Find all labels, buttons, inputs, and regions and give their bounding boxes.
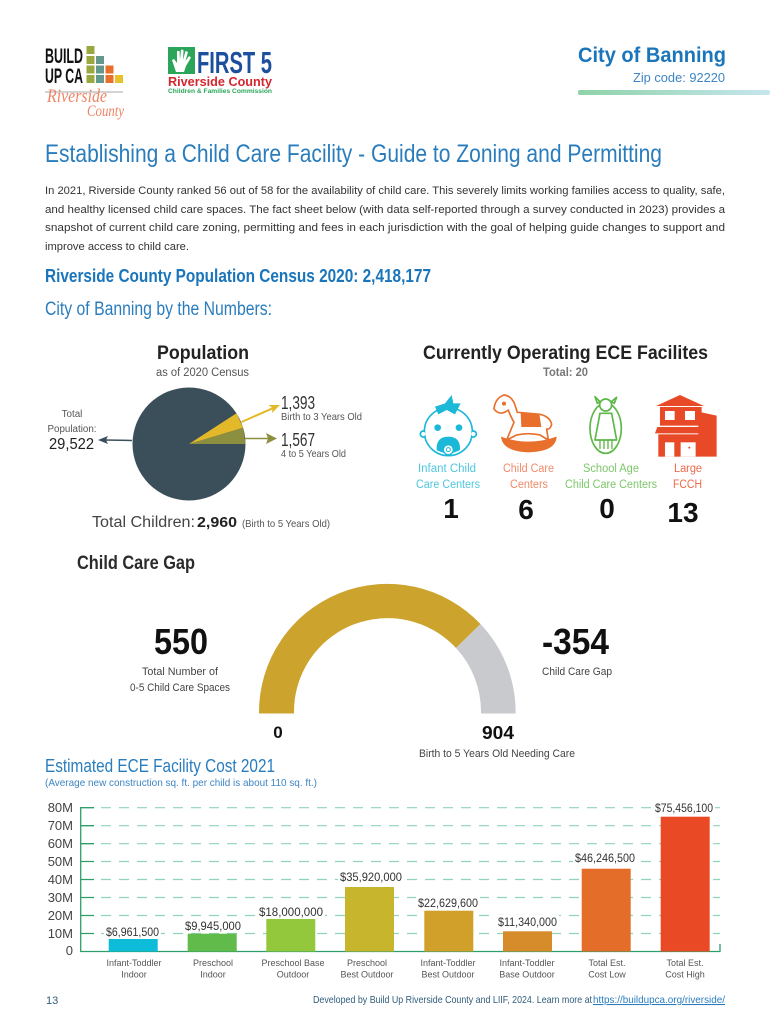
logo: First 5 Riverside County: [168, 45, 273, 95]
facility counts: [443, 493, 699, 528]
bar category labels: Total Est.: [666, 958, 704, 968]
facility counts: 0: [599, 493, 615, 524]
facility counts: 6: [518, 494, 534, 525]
title: Establishing a Child Care Facility - Guide to Zoning and Permitting: [45, 140, 662, 168]
panel: child care gap: [77, 553, 612, 760]
bar category labels: Total Est.: [588, 958, 626, 968]
bar value labels: $9,945,000: [185, 919, 241, 933]
ECE heading: Total: 20: [543, 367, 588, 379]
y axis: 60M: [48, 836, 73, 851]
header: city name: City of Banning: [578, 44, 726, 67]
label: school age: School Age: [583, 463, 639, 475]
bar category labels: Best Outdoor: [421, 970, 475, 980]
bar category labels: Indoor: [200, 970, 226, 980]
label: birth to 3: 1,393: [281, 393, 315, 413]
intro paragraph: and healthy licensed child care spaces. The fact sheet below (with data self-reported through a survey conducted in 2023) provides a: [45, 204, 726, 216]
total population label: Population:: [47, 424, 97, 435]
page number: 13: [46, 995, 58, 1007]
intro paragraph: improve access to child care.: [45, 241, 189, 253]
bar category labels: Indoor: [121, 970, 147, 980]
stat: 550: [130, 621, 230, 694]
intro paragraph: In 2021, Riverside County ranked 56 out of 58 for the availability of child care. This severely limits working families access to quality, safe,: [45, 185, 725, 197]
bar category labels: Cost High: [665, 970, 705, 980]
bar category labels: Best Outdoor: [340, 970, 394, 980]
total population label: [47, 409, 97, 453]
logo: First 5 Riverside County: FIRST 5: [197, 45, 272, 80]
facility counts: 1: [443, 493, 459, 524]
y axis: 70M: [48, 818, 73, 833]
y axis: 20M: [48, 908, 73, 923]
bar category labels: Outdoor: [277, 970, 309, 980]
population heading: [156, 343, 249, 379]
icon: girl jumping rope: [590, 397, 621, 453]
stat: 550: Total Number of: [142, 666, 219, 678]
logo: Build Up CA Riverside County: UP CA: [45, 65, 83, 88]
bar value labels: $22,629,600: [418, 896, 478, 910]
bar value labels: $6,961,500: [106, 925, 159, 939]
label: infant child care centers: [416, 463, 480, 491]
bar value labels: $11,340,000: [498, 915, 557, 929]
footer credit: Developed by Build Up Riverside County and LIIF, 2024. Learn more at: [313, 994, 592, 1006]
panel: ECE facilities: [416, 343, 717, 528]
y axis: 40M: [48, 872, 73, 887]
bar category labels: Cost Low: [588, 970, 626, 980]
gap heading: Child Care Gap: [77, 553, 195, 574]
label: large FCCH: FCCH: [673, 479, 702, 491]
bar category labels: Preschool Base: [261, 958, 325, 968]
bar category labels: [106, 958, 705, 980]
gauge maximum: 904: [482, 723, 514, 743]
label: school age: [565, 463, 657, 491]
logo: Build Up CA Riverside County: BUILD: [45, 45, 83, 68]
total children: (Birth to 5 Years Old): [242, 518, 330, 530]
label: child care centers: [503, 463, 554, 491]
footer credit: https://buildupca.org/riverside/: [593, 994, 725, 1006]
logo: Build Up CA Riverside County: [45, 45, 125, 120]
label: infant child care centers: Care Centers: [416, 479, 480, 491]
bar value labels: $18,000,000: [259, 905, 323, 919]
header: city name: Zip code: 92220: [633, 70, 725, 85]
intro paragraph: [45, 185, 726, 253]
label: child care centers: Centers: [510, 479, 548, 491]
y axis: [48, 800, 720, 958]
arrow: 4 to 5: [245, 433, 277, 444]
ECE heading: [423, 343, 708, 379]
total population label: 29,522: [49, 436, 94, 453]
bar category labels: Preschool: [193, 958, 233, 968]
y axis: 80M: [48, 800, 73, 815]
y axis: 30M: [48, 890, 73, 905]
label: large FCCH: [673, 463, 702, 491]
bar category labels: Base Outdoor: [499, 970, 555, 980]
stat: -354: -354: [542, 621, 609, 662]
header gradient bar: [578, 90, 770, 95]
bar value labels: $75,456,100: [655, 801, 713, 815]
label: child care centers: Child Care: [503, 463, 554, 475]
label: school age: Child Care Centers: [565, 479, 657, 491]
total children: 2,960: [197, 514, 237, 531]
bar category labels: Infant-Toddler: [420, 958, 476, 968]
ECE heading: Currently Operating ECE Facilites: [423, 343, 708, 364]
facility counts: 13: [667, 497, 699, 528]
total children: [92, 514, 330, 531]
label: 4 to 5: 1,567: [281, 430, 315, 450]
header: city name: [578, 44, 726, 85]
logo: Build Up CA Riverside County: County: [87, 103, 125, 120]
bars: [109, 817, 710, 952]
total children: Total Children:: [92, 514, 195, 531]
stat: 550: 550: [154, 621, 208, 662]
bar category labels: Preschool: [347, 958, 387, 968]
gauge: [259, 584, 516, 714]
bar category labels: Infant-Toddler: [106, 958, 162, 968]
gauge maximum: Birth to 5 Years Old Needing Care: [419, 748, 575, 760]
bar value labels: $46,246,500: [575, 851, 635, 865]
arrow: total population: [98, 436, 132, 444]
heading: county population: Riverside County Population Census 2020: 2,418,177: [45, 266, 431, 286]
heading: facility cost: (Average new construction sq. ft. per child is about 110 sq. ft.): [45, 777, 317, 789]
gauge maximum: [419, 723, 575, 760]
arrow: birth to 3: [242, 405, 280, 422]
logo: First 5 Riverside County: Riverside County: [168, 74, 273, 89]
icon: baby: [420, 395, 476, 456]
panel: population: [47, 343, 362, 531]
population heading: as of 2020 Census: [156, 367, 249, 379]
bar chart: [48, 800, 720, 980]
icon: rocking horse: [494, 395, 557, 452]
total population label: Total: [62, 409, 82, 420]
logo: Build Up CA Riverside County: Riverside: [46, 86, 107, 107]
heading: facility cost: [45, 756, 317, 789]
stat: 550: 0-5 Child Care Spaces: [130, 682, 230, 694]
logo: First 5 Riverside County: Children & Families Commission: [168, 88, 272, 95]
y axis: 10M: [48, 926, 73, 941]
y axis: 50M: [48, 854, 73, 869]
icon: house: [655, 395, 717, 457]
heading: facility cost: Estimated ECE Facility Cost 2021: [45, 756, 275, 776]
pie chart: [132, 388, 246, 500]
y axis: 0: [66, 943, 73, 958]
label: birth to 3: [281, 393, 362, 423]
bar value labels: [104, 801, 715, 939]
heading: by the numbers: City of Banning by the Numbers:: [45, 299, 272, 320]
bar value labels: $35,920,000: [340, 870, 402, 884]
label: infant child care centers: Infant Child: [418, 463, 476, 475]
intro paragraph: snapshot of current child care zoning, permitting and fees in each jurisdiction with the goal of helping guide changes to support and: [45, 222, 725, 234]
label: 4 to 5: 4 to 5 Years Old: [281, 448, 346, 460]
label: large FCCH: Large: [674, 463, 702, 475]
gauge minimum: 0: [273, 723, 283, 742]
label: birth to 3: Birth to 3 Years Old: [281, 411, 362, 423]
population heading: Population: [157, 343, 249, 364]
stat: -354: Child Care Gap: [542, 666, 612, 678]
bar category labels: Infant-Toddler: [499, 958, 555, 968]
label: 4 to 5: [281, 430, 346, 460]
